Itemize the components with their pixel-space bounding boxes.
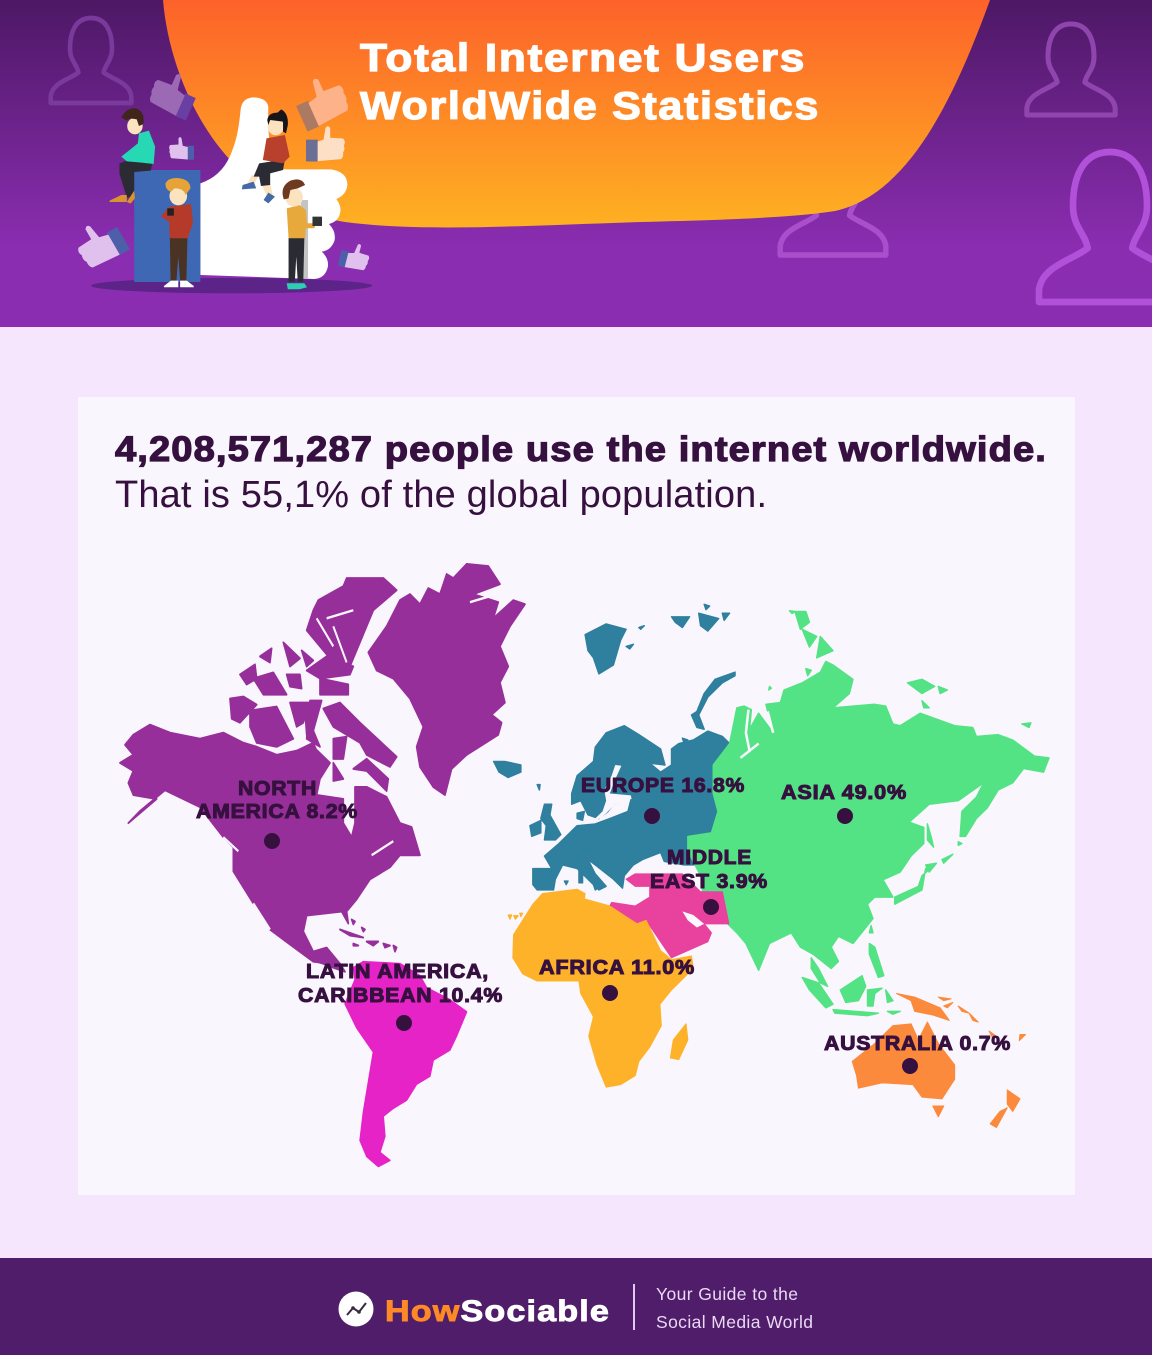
- big white thumb: [200, 97, 347, 279]
- label: asia: ASIA 49.0%: [781, 782, 907, 804]
- headline text: 4,208,571,287 people use the internet worldwide.: [115, 430, 1047, 469]
- icon: ghost user top left: [51, 18, 131, 103]
- shadow ellipse: [91, 278, 372, 293]
- region: asia: [688, 611, 1049, 1016]
- label: north america: AMERICA 8.2%: [196, 801, 358, 823]
- region: north america and greenland: [120, 564, 525, 972]
- map markers: [264, 808, 918, 1074]
- icon: ghost user top right: [1027, 24, 1115, 115]
- orange blob: [163, 0, 990, 227]
- region: middle east: [610, 874, 729, 958]
- region: south america: [345, 962, 467, 1166]
- label: latin america: [298, 961, 503, 1007]
- label: africa: AFRICA 11.0%: [539, 957, 695, 979]
- icon: ghost user behind blob: [780, 145, 886, 255]
- title: [360, 37, 820, 128]
- small thumb: lower left: [69, 213, 130, 272]
- small thumb: lower right: [338, 240, 372, 273]
- label: latin america: CARIBBEAN 10.4%: [298, 985, 503, 1007]
- headline text: That is 55,1% of the global population.: [115, 474, 767, 516]
- person: red shirt standing: [161, 178, 194, 287]
- small thumb: lilac: [169, 137, 194, 160]
- headline text: [115, 430, 1047, 516]
- icon: ghost user bottom right: [1039, 152, 1152, 302]
- region: europe: [494, 604, 735, 890]
- label: middle east: [650, 847, 768, 893]
- region: australia and oceania: [852, 994, 1025, 1127]
- label: middle east: MIDDLE: [667, 847, 752, 869]
- bay channels: [223, 594, 497, 930]
- small thumb: faded purple: [146, 66, 202, 121]
- title: WorldWide Statistics: [360, 85, 820, 128]
- header banner: [0, 0, 1152, 327]
- illustration: thumbs and people: [91, 97, 372, 293]
- label: australia: AUSTRALIA 0.7%: [824, 1033, 1011, 1055]
- icon: logo chart: [338, 1292, 374, 1326]
- world map: [120, 564, 1049, 1166]
- person: yellow shirt with phone: [283, 179, 322, 289]
- logo wordmark: How Sociable: [385, 1295, 610, 1328]
- divider: [633, 1284, 635, 1330]
- region: africa: [508, 889, 693, 1087]
- tagline: Your Guide to the: [656, 1284, 798, 1304]
- tagline: Social Media World: [656, 1312, 813, 1332]
- blue block: [134, 170, 200, 282]
- person: teal shirt: [110, 108, 155, 204]
- small thumb: peach: [289, 70, 353, 132]
- small thumb: cream: [306, 126, 345, 161]
- arctic inlets: [740, 710, 773, 758]
- tagline: [656, 1284, 813, 1332]
- title: Total Internet Users: [360, 37, 806, 80]
- panel: map card: [78, 397, 1075, 1195]
- label: middle east: EAST 3.9%: [650, 871, 768, 893]
- footer: [0, 1258, 1152, 1355]
- person: black hair seated: [242, 109, 290, 203]
- label: north america: NORTH: [238, 778, 317, 800]
- label: europe: EUROPE 16.8%: [581, 775, 745, 797]
- label: north america: [196, 778, 358, 823]
- label: latin america: LATIN AMERICA,: [306, 961, 489, 983]
